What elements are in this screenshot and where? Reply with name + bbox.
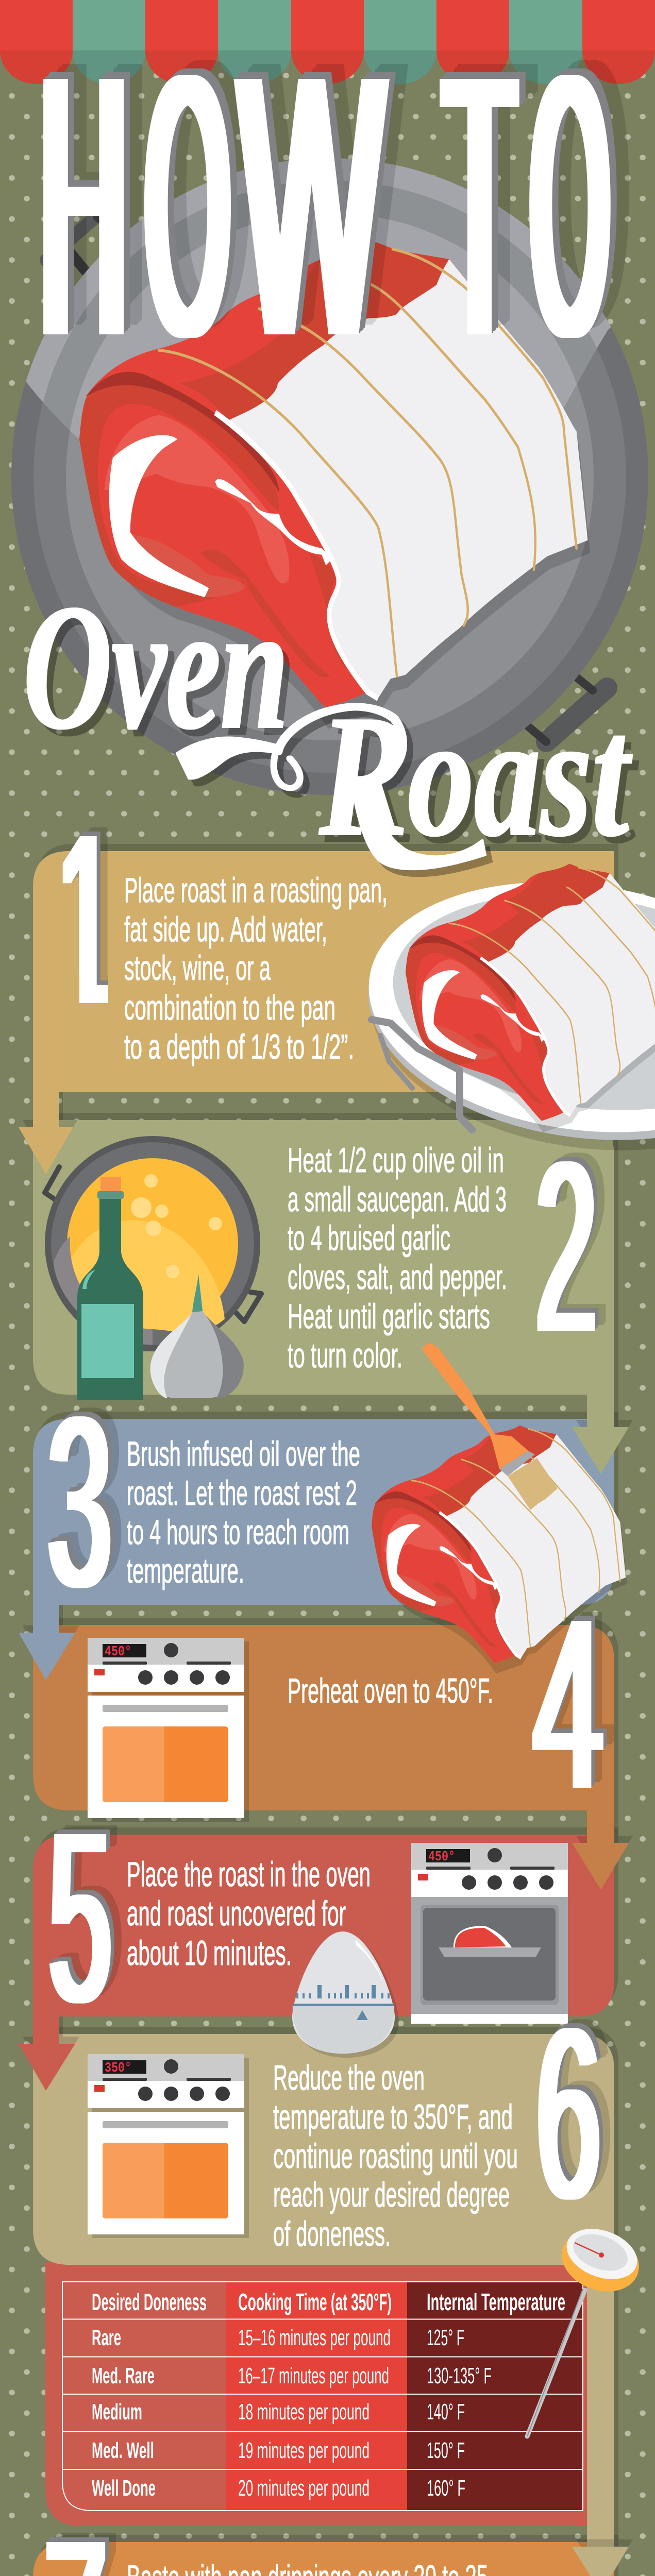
step 3 text: temperature. [127, 1551, 244, 1590]
table rows: 140° F [427, 2399, 465, 2425]
table rows: 160° F [427, 2476, 465, 2501]
text: 3 [48, 1366, 111, 1637]
panel: step 3 with arrow [19, 1412, 618, 1680]
step 4 illustration: oven at 450: 450° [105, 1645, 131, 1660]
step 3 illustration: roast being basted [372, 1426, 627, 1673]
title: HOW TO: H [40, 0, 127, 413]
table rows: 19 minutes per pound [238, 2438, 370, 2463]
step 2 text: Heat until garlic starts [288, 1297, 490, 1336]
title: HOW TO: W [240, 0, 385, 413]
step 5 illustration: open oven with roast: 450° [428, 1850, 455, 1865]
step 6 text: Reduce the oven [273, 2058, 425, 2097]
title: Oven Roast script: Oven [23, 567, 289, 767]
step 1 text: fat side up. Add water, [124, 910, 327, 949]
panels, drawn bottom to top so each arrow overlaps the next step [19, 844, 633, 2576]
panel: step 4 with arrow [33, 1618, 633, 1890]
step 2 text: to 4 bruised garlic [288, 1218, 450, 1258]
table rows: Rare [92, 2325, 121, 2350]
table rows: 150° F [427, 2438, 465, 2463]
step 3 illustration: basting brush [422, 1343, 558, 1510]
step 1 text [124, 871, 388, 1066]
step 5 text: about 10 minutes. [127, 1934, 292, 1973]
title roast illustration [79, 242, 590, 728]
step 6 text: of doneness. [273, 2214, 391, 2253]
table rows: Med. Rare [92, 2363, 155, 2388]
step 4 text: Preheat oven to 450°F. [288, 1671, 493, 1710]
panel: step 6 [33, 2027, 618, 2547]
meat thermometer [527, 2219, 648, 2436]
table header: Internal Temperature [427, 2289, 565, 2315]
panel: step 7 with arrow [19, 2535, 618, 2576]
step 1 text: combination to the pan [124, 988, 335, 1027]
step 1 text: Place roast in a roasting pan, [124, 871, 388, 910]
step 3 text: roast. Let the roast rest 2 [127, 1473, 357, 1513]
table header [92, 2289, 565, 2315]
step 5 illustration: kitchen timer [292, 1931, 399, 2058]
step 5 text: Place the roast in the oven [127, 1855, 371, 1894]
step 1 text: to a depth of 1/3 to 1/2”. [124, 1027, 354, 1066]
table rows: Medium [92, 2399, 142, 2425]
table header: Desired Doneness [92, 2289, 207, 2315]
step 5 text: and roast uncovered for [127, 1894, 346, 1933]
roasting pan in title [11, 158, 648, 795]
step 5 text [127, 1855, 371, 1973]
panel: step 2 with arrow [33, 1113, 633, 1474]
step 6 illustration: oven at 350: 350° [105, 2061, 131, 2076]
table rows: 15–16 minutes per pound [238, 2325, 391, 2350]
step 2 text: cloves, salt, and pepper. [288, 1258, 507, 1297]
step 5 illustration: open oven with roast [411, 1843, 568, 2024]
table rows: Well Done [92, 2476, 156, 2501]
awning [0, 0, 655, 84]
table rows: 20 minutes per pound [238, 2476, 370, 2501]
step 2 illustration: saucepan [45, 1136, 261, 1351]
table header: Cooking Time (at 350°F) [238, 2289, 392, 2315]
step 3 text: Brush infused oil over the [127, 1434, 360, 1473]
step 2 text [288, 1141, 507, 1375]
panel: doneness table backing [45, 2262, 587, 2526]
table rows: Med. Well [92, 2438, 154, 2463]
step 1 text: stock, wine, or a [124, 948, 271, 988]
title: HOW TO: O [146, 0, 229, 413]
table rows: 18 minutes per pound [238, 2399, 370, 2425]
panel: step 5 with arrow [19, 1827, 618, 2091]
arrow from step 6 to step 7 [572, 2547, 629, 2576]
title: Oven Roast script [23, 567, 633, 873]
step 4 illustration: oven at 450 [88, 1638, 249, 1822]
doneness table [62, 2282, 583, 2511]
step 2 illustration: olive oil bottle [77, 1177, 143, 1400]
step 6 illustration: oven at 350 [88, 2054, 249, 2238]
step 6 text [273, 2058, 518, 2253]
step 2 text: to turn color. [288, 1336, 402, 1375]
step 6 arrow shadow [576, 2539, 633, 2576]
table rows: 16–17 minutes per pound [238, 2363, 389, 2388]
step 2 text: Heat 1/2 cup olive oil in [288, 1141, 504, 1180]
text: 1 [57, 784, 115, 1055]
table rows: 125° F [427, 2325, 464, 2350]
step 3 text: to 4 hours to reach room [127, 1513, 349, 1552]
step 1 illustration: roast on white pan [352, 856, 655, 1177]
table rows [92, 2325, 492, 2501]
table rows: 130-135° F [427, 2363, 492, 2388]
step 3 text [127, 1434, 360, 1590]
step 2 illustration: garlic bulb [150, 1274, 244, 1398]
panel: step 1 with arrow [19, 844, 618, 1174]
text: 5 [49, 1782, 111, 2053]
